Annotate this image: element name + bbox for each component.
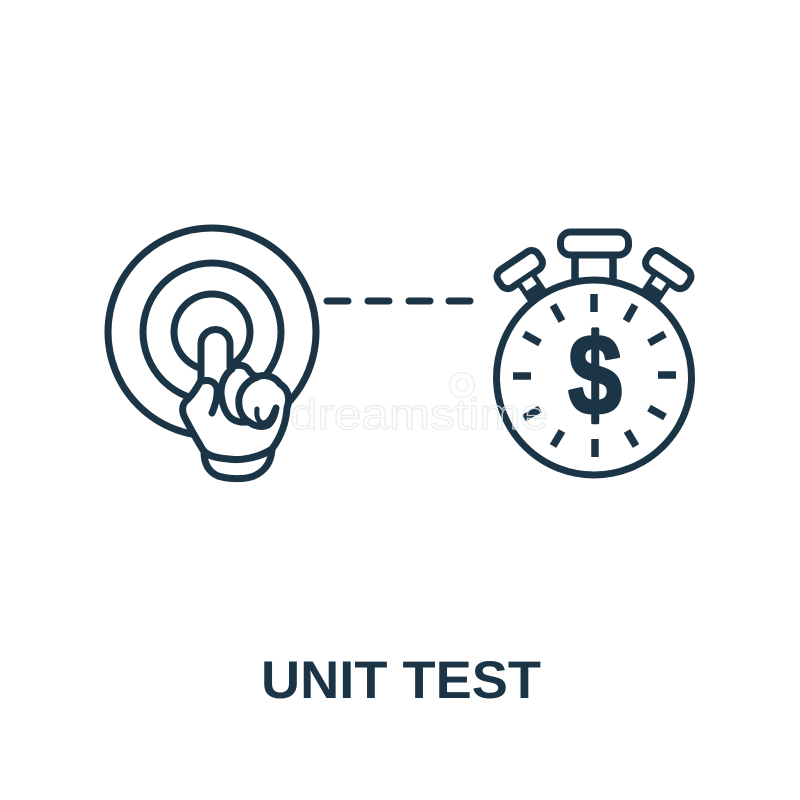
watermark: dreamstime xyxy=(290,390,548,439)
middle finger curl xyxy=(221,369,249,422)
dollar sign: $ xyxy=(568,312,622,439)
watch face xyxy=(496,280,692,475)
hand outline xyxy=(183,330,289,460)
thumb crease xyxy=(203,380,217,413)
icon: stopwatch with dollar sign xyxy=(494,232,694,475)
top button xyxy=(560,232,628,280)
little finger crease xyxy=(257,409,274,423)
tick marks xyxy=(513,294,676,457)
ring finger curl xyxy=(239,377,276,426)
title: UNIT TEST xyxy=(261,651,541,710)
hand sleeve xyxy=(204,450,272,479)
watermark xyxy=(290,372,548,439)
left side button xyxy=(494,247,558,311)
icon: target with pointing hand xyxy=(108,228,316,479)
dashed connector arrow xyxy=(327,298,470,304)
target rings xyxy=(108,228,316,436)
right side button xyxy=(630,247,694,311)
